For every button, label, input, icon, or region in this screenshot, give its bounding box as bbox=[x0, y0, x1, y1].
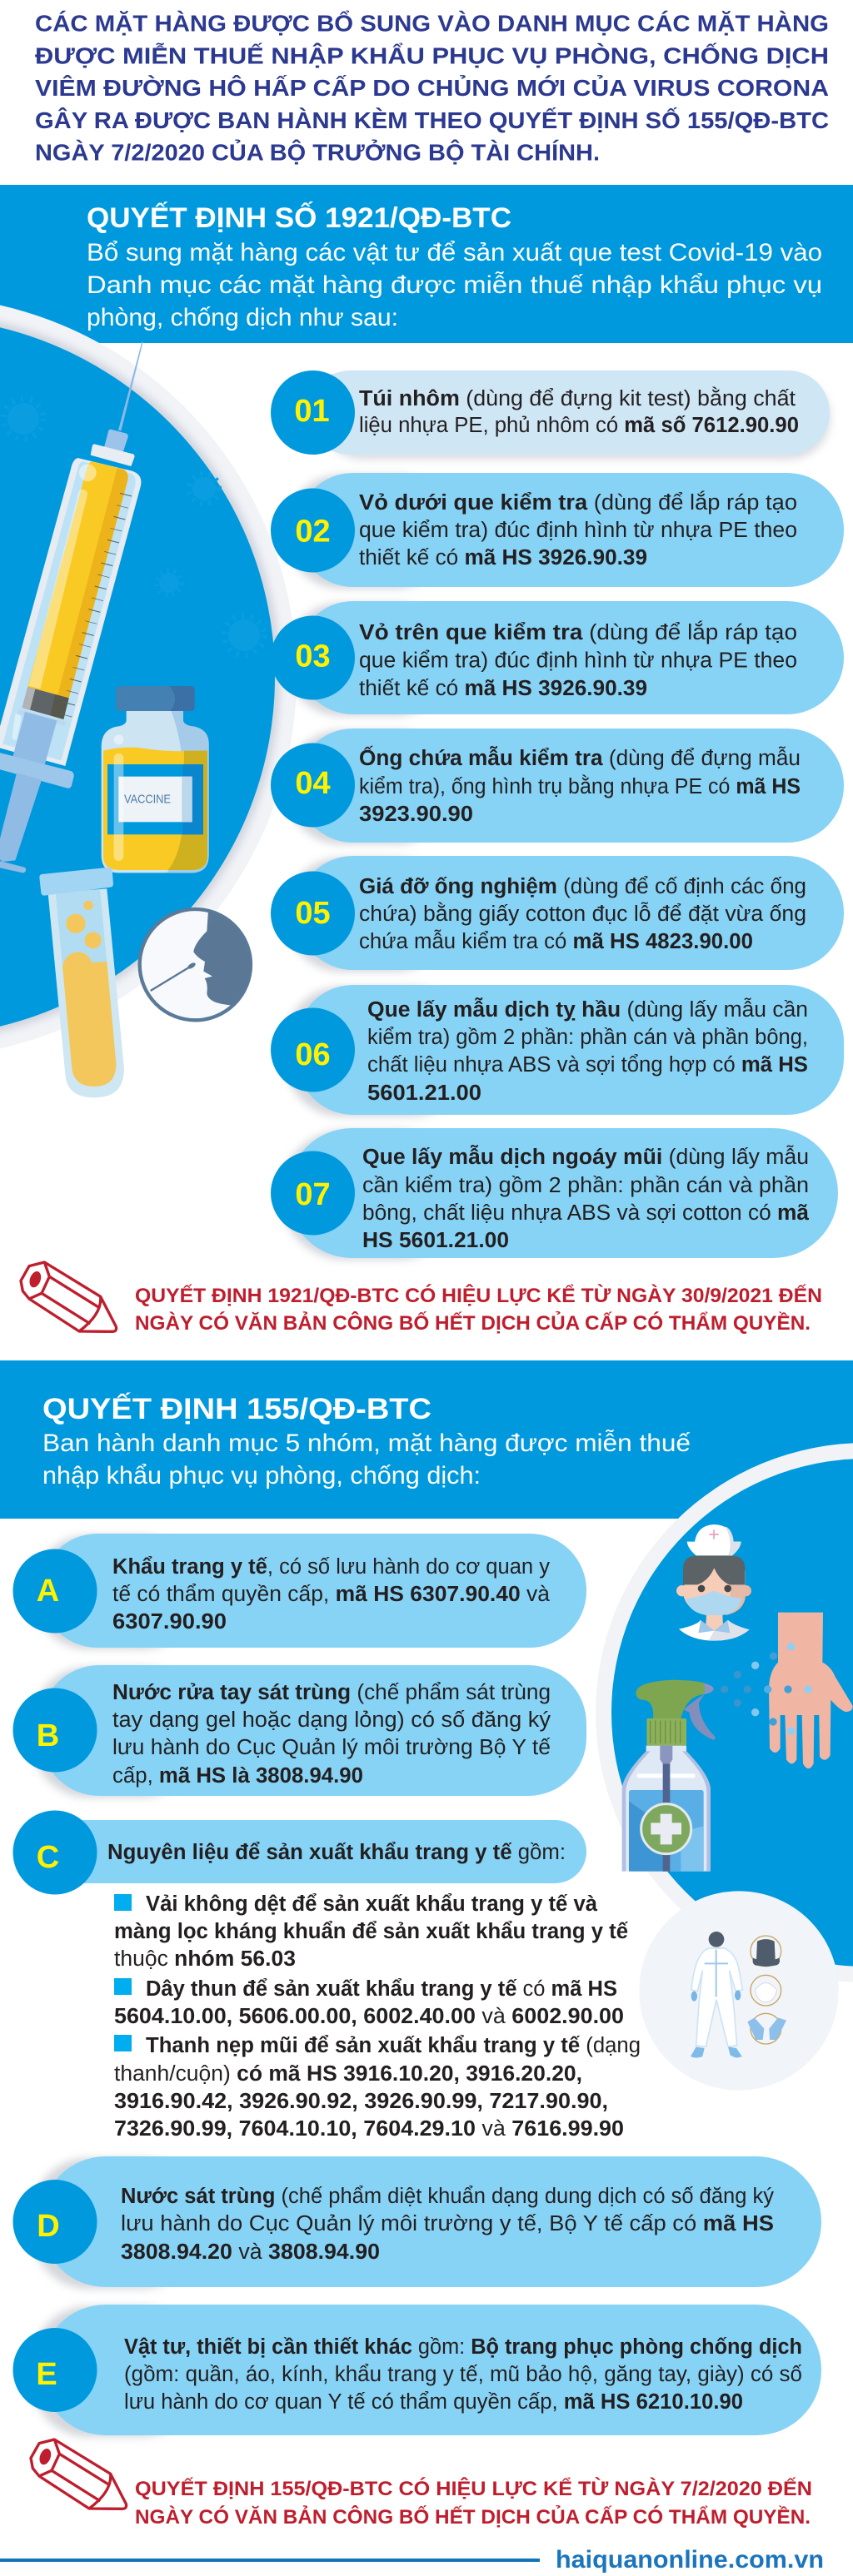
item C bullet list: thanh/cuộn) có mã HS 3916.10.20, 3916.20.20, bbox=[114, 2062, 582, 2086]
item B: tay dạng gel hoặc dạng lỏng) có số đăng ký bbox=[112, 1708, 551, 1732]
callout: decision 1921 effective date: QUYẾT ĐỊNH 1921/QĐ-BTC CÓ HIỆU LỰC KỂ TỪ NGÀY 30/9/2021 ĐẾN bbox=[135, 1284, 822, 1307]
item 07: Que lấy mẫu dịch ngoáy mũi (dùng lấy mẫu bbox=[362, 1144, 809, 1169]
item 05: chứa) bằng giấy cotton đục lỗ để đặt vừa ống bbox=[359, 902, 806, 926]
item C bullet list: Dây thun để sản xuất khẩu trang y tế có mã HS bbox=[146, 1977, 617, 2001]
item 01 bbox=[271, 370, 831, 460]
item C bullet list: Vải không dệt để sản xuất khẩu trang y tế và bbox=[146, 1892, 598, 1916]
item B bbox=[13, 1665, 586, 1798]
list: decision 1921 items bbox=[271, 370, 844, 1260]
item 02: Vỏ dưới que kiểm tra (dùng để lắp ráp tạo bbox=[359, 490, 797, 515]
heading: decision 1921: Danh mục các mặt hàng được miễn thuế nhập khẩu phục vụ bbox=[87, 271, 822, 299]
item 07: cần kiểm tra) gồm 2 phần: phần cán và phần bbox=[362, 1174, 809, 1197]
item 06 bbox=[271, 985, 844, 1116]
item E: E bbox=[36, 2357, 57, 2392]
item 07: bông, chất liệu nhựa ABS và sợi cotton có mã bbox=[362, 1201, 810, 1225]
item 01: liệu nhựa PE, phủ nhôm có mã số 7612.90.90 bbox=[359, 414, 799, 437]
item 03: Vỏ trên que kiểm tra (dùng để lắp ráp tạo bbox=[359, 620, 797, 644]
item 02: 02 bbox=[295, 515, 331, 550]
heading: decision 155: QUYẾT ĐỊNH 155/QĐ-BTC bbox=[42, 1392, 431, 1425]
item C bullet list bbox=[114, 1892, 641, 2141]
illustration: nurse, sanitizer, hand bbox=[622, 1524, 853, 1872]
item 05 bbox=[271, 856, 844, 972]
item 02: thiết kế có mã HS 3926.90.39 bbox=[359, 546, 647, 569]
icon: nurse bbox=[676, 1524, 751, 1641]
item 04: 04 bbox=[295, 766, 331, 801]
title: CÁC MẶT HÀNG ĐƯỢC BỔ SUNG VÀO DANH MỤC CÁC MẶT HÀNG bbox=[35, 10, 829, 37]
item A bbox=[13, 1534, 586, 1649]
callout: decision 1921 effective date: NGÀY CÓ VĂN BẢN CÔNG BỐ HẾT DỊCH CỦA CẤP CÓ THẨM QUYỀN. bbox=[135, 1310, 811, 1335]
item 03: 03 bbox=[295, 639, 331, 674]
item 04: Ống chứa mẫu kiểm tra (dùng để đựng mẫu bbox=[359, 745, 801, 770]
heading: decision 155 bbox=[42, 1392, 691, 1489]
icon: syringe bbox=[0, 342, 143, 873]
callout: decision 1921 effective date bbox=[135, 1284, 822, 1335]
item 03: thiết kế có mã HS 3926.90.39 bbox=[359, 677, 647, 700]
icon: protective suit bbox=[691, 1932, 742, 2058]
item 03: que kiểm tra) đúc định hình từ nhựa PE theo bbox=[359, 649, 797, 673]
icon: pencil 2 bbox=[31, 2439, 127, 2509]
item C: C bbox=[37, 1840, 59, 1875]
item D bbox=[13, 2156, 821, 2289]
panel: decision 1921 header band bbox=[0, 185, 853, 343]
item A: Khẩu trang y tế, có số lưu hành do cơ quan y bbox=[112, 1555, 550, 1579]
title bbox=[35, 10, 829, 165]
callout: decision 155 effective date: NGÀY CÓ VĂN BẢN CÔNG BỐ HẾT DỊCH CỦA CẤP CÓ THẨM QUYỀN. bbox=[135, 2504, 811, 2529]
item E: Vật tư, thiết bị cần thiết khác gồm: Bộ trang phục phòng chống dịch bbox=[124, 2335, 802, 2359]
panel: decision 155 header band bbox=[0, 1360, 853, 1519]
icon: hand bbox=[721, 1613, 853, 1768]
item C bullet list: Thanh nẹp mũi để sản xuất khẩu trang y tế (dạng bbox=[146, 2034, 641, 2057]
icon: vaccine vial bbox=[102, 686, 209, 873]
item 06: Que lấy mẫu dịch tỵ hầu (dùng lấy mẫu cần bbox=[367, 997, 808, 1022]
icon: test tube bbox=[39, 868, 124, 1097]
item B: lưu hành do Cục Quản lý môi trường Bộ Y tế bbox=[112, 1736, 551, 1759]
item C bullet list: 3916.90.42, 3926.90.92, 3926.90.99, 7217.90.90, bbox=[114, 2090, 608, 2113]
callout: decision 155 effective date bbox=[135, 2477, 812, 2529]
item 07: HS 5601.21.00 bbox=[362, 1229, 509, 1252]
item 07: 07 bbox=[295, 1177, 331, 1212]
item A: A bbox=[37, 1574, 59, 1609]
illustration: protective suit circle bbox=[639, 1891, 839, 2091]
heading: decision 155: nhập khẩu phục vụ phòng, chống dịch: bbox=[42, 1462, 481, 1489]
icon: sanitizer spray bottle bbox=[622, 1680, 716, 1872]
item B: B bbox=[37, 1718, 59, 1753]
item 04 bbox=[271, 729, 844, 844]
item E bbox=[13, 2305, 821, 2437]
background disc: right illustration bbox=[596, 1443, 853, 1982]
item 01: 01 bbox=[294, 394, 330, 429]
item C: Nguyên liệu để sản xuất khẩu trang y tế gồm: bbox=[107, 1841, 566, 1864]
item 06: kiểm tra) gồm 2 phần: phần cán và phần bông, bbox=[367, 1026, 808, 1049]
item D: D bbox=[37, 2209, 60, 2244]
item 05: Giá đỡ ống nghiệm (dùng để cố định các ống bbox=[359, 875, 806, 898]
heading: decision 1921: QUYẾT ĐỊNH SỐ 1921/QĐ-BTC bbox=[87, 201, 511, 234]
item C bullet list: 7326.90.99, 7604.10.10, 7604.29.10 và 7616.99.90 bbox=[114, 2117, 624, 2141]
item 07 bbox=[271, 1128, 838, 1260]
item 04: 3923.90.90 bbox=[359, 803, 473, 826]
footer: source line and website bbox=[0, 2546, 824, 2574]
heading: decision 155: Ban hành danh mục 5 nhóm, mặt hàng được miễn thuế bbox=[42, 1430, 691, 1457]
item 05: 05 bbox=[295, 896, 331, 931]
item C bullet list: thuộc nhóm 56.03 bbox=[114, 1947, 296, 1971]
vial label text: VACCINE bbox=[124, 793, 171, 807]
item 06: 06 bbox=[295, 1037, 331, 1072]
item 06: 5601.21.00 bbox=[367, 1082, 481, 1105]
item C bbox=[13, 1810, 586, 1895]
item D: Nước sát trùng (chế phẩm diệt khuẩn dạng dung dịch có số đăng ký bbox=[121, 2185, 774, 2208]
item B: Nước rửa tay sát trùng (chế phẩm sát trùng bbox=[112, 1681, 551, 1704]
item 03 bbox=[271, 601, 844, 716]
footer: source line and website: haiquanonline.com.vn bbox=[556, 2546, 824, 2574]
item 02 bbox=[271, 473, 844, 589]
item 05: chứa mẫu kiểm tra có mã HS 4823.90.00 bbox=[359, 929, 753, 953]
title: ĐƯỢC MIỄN THUẾ NHẬP KHẨU PHỤC VỤ PHÒNG, CHỐNG DỊCH bbox=[35, 42, 829, 68]
item 02: que kiểm tra) đúc định hình từ nhựa PE theo bbox=[359, 519, 797, 542]
item B: cấp, mã HS là 3808.94.90 bbox=[112, 1764, 363, 1788]
callout: decision 155 effective date: QUYẾT ĐỊNH 155/QĐ-BTC CÓ HIỆU LỰC KỂ TỪ NGÀY 7/2/2020 ĐẾN bbox=[135, 2477, 812, 2500]
heading: decision 1921: phòng, chống dịch như sau: bbox=[87, 304, 398, 331]
list: decision 155 items bbox=[13, 1534, 821, 2437]
icon: equipment rings bbox=[747, 1936, 786, 2044]
title: GÂY RA ĐƯỢC BAN HÀNH KÈM THEO QUYẾT ĐỊNH SỐ 155/QĐ-BTC bbox=[35, 107, 829, 133]
icon: nose swab bbox=[140, 909, 256, 1020]
item A: 6307.90.90 bbox=[112, 1610, 227, 1634]
item D: 3808.94.20 và 3808.94.90 bbox=[121, 2240, 380, 2264]
heading: decision 1921 bbox=[87, 201, 822, 331]
illustration: syringe, vial, test tube, swab bbox=[0, 342, 256, 1097]
item E: (gồm: quần, áo, kính, khẩu trang y tế, mũ bảo hộ, găng tay, giày) có số bbox=[124, 2363, 802, 2386]
background disc: left illustration bbox=[0, 296, 297, 1058]
item C bullet list: màng lọc kháng khuẩn để sản xuất khẩu trang y tế bbox=[114, 1920, 629, 1943]
item E: lưu hành do cơ quan Y tế có thẩm quyền cấp, mã HS 6210.10.90 bbox=[124, 2390, 743, 2414]
heading: decision 1921: Bổ sung mặt hàng các vật tư để sản xuất que test Covid-19 vào bbox=[87, 239, 822, 266]
title: NGÀY 7/2/2020 CỦA BỘ TRƯỞNG BỘ TÀI CHÍNH. bbox=[35, 138, 600, 165]
title: VIÊM ĐƯỜNG HÔ HẤP CẤP DO CHỦNG MỚI CỦA VIRUS CORONA bbox=[35, 74, 829, 101]
item D: lưu hành do Cục Quản lý môi trường y tế, Bộ Y tế cấp có mã HS bbox=[121, 2212, 774, 2235]
item 04: kiểm tra), ống hình trụ bằng nhựa PE có mã HS bbox=[359, 774, 801, 798]
item 01: Túi nhôm (dùng để đựng kit test) bằng chất bbox=[359, 386, 796, 410]
item 06: chất liệu nhựa ABS và sợi tổng hợp có mã HS bbox=[367, 1053, 808, 1077]
icon: pencil 1 bbox=[21, 1262, 117, 1331]
item A: tế có thẩm quyền cấp, mã HS 6307.90.40 và bbox=[112, 1583, 551, 1606]
item C bullet list: 5604.10.00, 5606.00.00, 6002.40.00 và 6002.90.00 bbox=[114, 2005, 624, 2028]
